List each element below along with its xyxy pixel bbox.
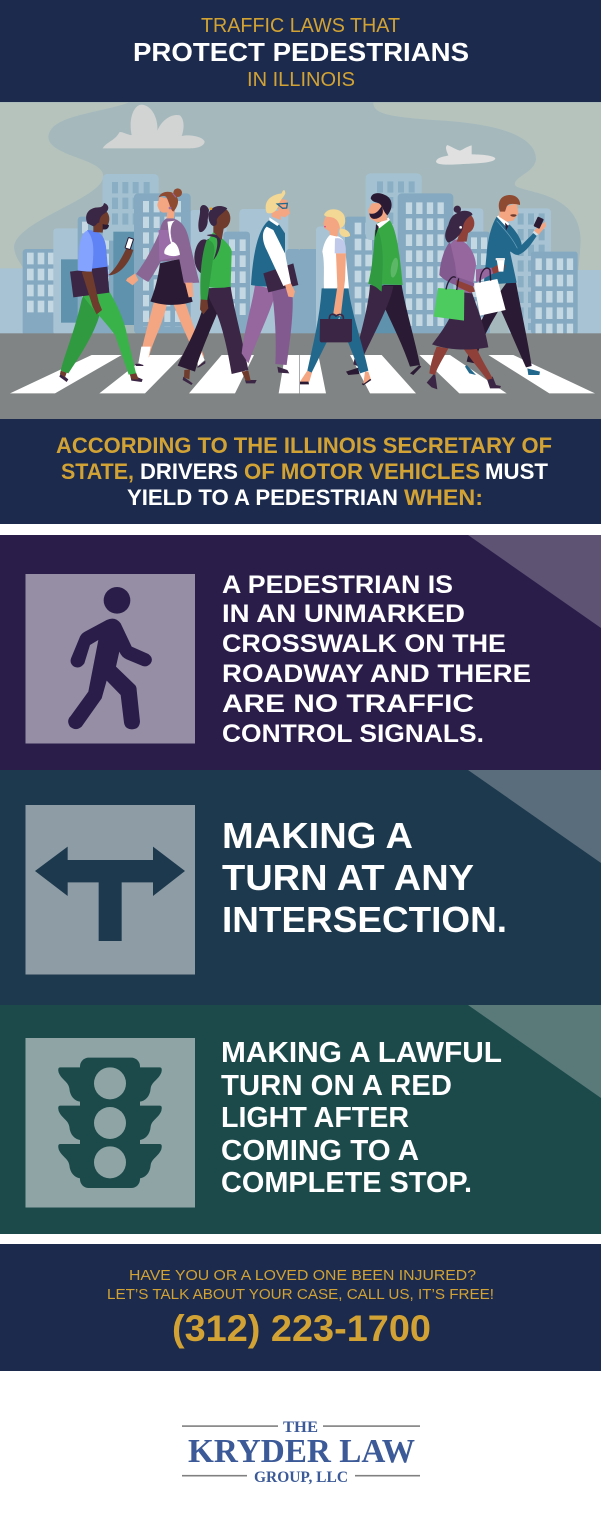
intro band [0, 419, 601, 524]
text: panel 3: COMPLETE STOP. [221, 1167, 472, 1199]
footer: call to action: (312) 223-1700 [172, 1308, 431, 1349]
left half of illustration [0, 103, 301, 420]
right half of illustration [299, 103, 601, 420]
text: panel 2 [222, 815, 507, 940]
intro band: OF MOTOR VEHICLES [244, 459, 480, 484]
panel: turn at intersection [0, 770, 601, 1005]
icon: two-way turn arrow [26, 805, 195, 974]
logo: The Kryder Law Group, LLC: THE [283, 1419, 318, 1436]
footer: call to action: HAVE YOU OR A LOVED ONE BEEN INJURED? [129, 1267, 476, 1284]
header: title: PROTECT PEDESTRIANS [133, 37, 469, 67]
logo: The Kryder Law Group, LLC: GROUP, LLC [254, 1469, 348, 1486]
text: panel 3 [221, 1037, 502, 1199]
person 2: woman with white bag [126, 188, 205, 367]
person 3: woman with backpack [178, 205, 257, 385]
text: panel 3: COMING TO A [221, 1135, 419, 1167]
intro band: MUST [485, 459, 549, 484]
intro band: DRIVERS [140, 459, 238, 484]
text: panel 1 [222, 571, 531, 748]
header: title: TRAFFIC LAWS THAT [201, 15, 400, 37]
text: panel 2: INTERSECTION. [222, 899, 507, 940]
text: panel 2: MAKING A [222, 815, 413, 856]
intro band: YIELD TO A PEDESTRIAN [127, 485, 398, 510]
header: title: IN ILLINOIS [247, 69, 355, 91]
person 4: man with vest [242, 190, 298, 373]
person 8: man with phone and coffee [465, 195, 546, 375]
person 5: blonde woman with handbag [300, 209, 371, 385]
icon: pedestrian walking [26, 574, 195, 744]
text: panel 1: A PEDESTRIAN IS [222, 571, 453, 599]
logo: The Kryder Law Group, LLC [182, 1419, 420, 1486]
logo: The Kryder Law Group, LLC: KRYDER LAW [188, 1433, 415, 1470]
person 1: man with phone [59, 203, 143, 382]
intro band: STATE, [61, 459, 134, 484]
text: panel 1: ARE NO TRAFFIC [222, 690, 474, 718]
icon: traffic light [26, 1038, 195, 1208]
text: panel 1: CROSSWALK ON THE [222, 630, 506, 658]
text: panel 3: TURN ON A RED [221, 1070, 452, 1102]
illustration: pedestrians on a crosswalk [0, 102, 601, 420]
text: panel 3: LIGHT AFTER [221, 1102, 409, 1134]
text: panel 3: MAKING A LAWFUL [221, 1037, 502, 1069]
intro band: ACCORDING TO THE ILLINOIS SECRETARY OF [56, 433, 552, 458]
panel: unmarked crosswalk [0, 535, 601, 770]
person 6: bearded man in green cardigan [346, 193, 421, 375]
text: panel 1: ROADWAY AND THERE [222, 660, 531, 688]
header: title [0, 0, 601, 102]
intro band: WHEN: [404, 485, 483, 510]
footer: call to action: LET’S TALK ABOUT YOUR CASE, CALL US, IT’S FREE! [107, 1286, 494, 1303]
text: panel 1: IN AN UNMARKED [222, 600, 465, 628]
footer: call to action [0, 1244, 601, 1371]
text: panel 1: CONTROL SIGNALS. [222, 720, 484, 748]
text: panel 2: TURN AT ANY [222, 857, 474, 898]
person 7: woman with shopping bags [427, 206, 506, 389]
panel: lawful turn on red [0, 1005, 601, 1234]
